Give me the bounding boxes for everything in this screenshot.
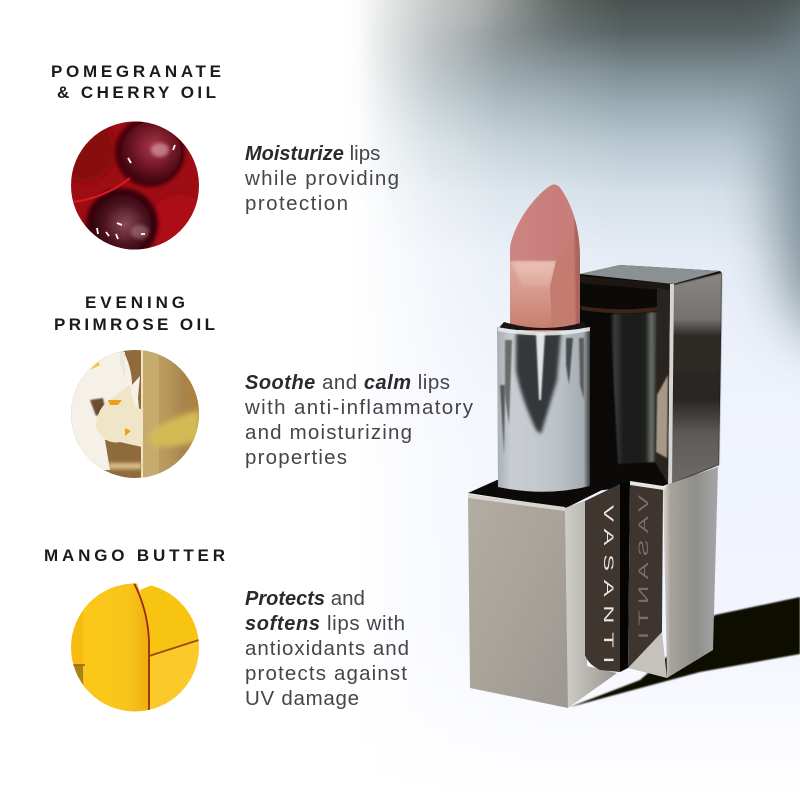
lipstick base [468, 467, 718, 708]
description: protects and softens: softens lips with [245, 612, 405, 635]
cast shadow of lipstick [570, 597, 800, 707]
photo: primrose flower and golden oil [70, 345, 202, 480]
lipstick metal tube [497, 322, 590, 492]
description: soothe and calm: properties [245, 446, 347, 469]
description: moisturize: protection [245, 192, 348, 215]
description: moisturize [244, 142, 399, 215]
description: soothe and calm: with anti-inflammatory [244, 396, 474, 419]
description: soothe and calm: and moisturizing [245, 421, 412, 444]
description: protects and softens: UV damage [245, 687, 359, 710]
photo: sliced mango [71, 584, 199, 712]
mirrored brand reflection: VASANTI [636, 495, 651, 639]
heading: evening primrose oil [54, 293, 215, 334]
heading: evening primrose oil: EVENING [85, 293, 185, 312]
description: moisturize: while providing [244, 167, 399, 190]
heading: pomegranate & cherry oil [51, 62, 221, 102]
heading: mango butter: MANGO BUTTER [44, 546, 225, 565]
engraved brand VASANTI: VASANTI [601, 505, 616, 663]
description: soothe and calm: Soothe and calm lips [245, 371, 450, 394]
lipstick product [468, 180, 722, 708]
heading: evening primrose oil: PRIMROSE OIL [54, 315, 215, 334]
lipstick cap [580, 265, 722, 492]
description: protects and softens: protects against [245, 662, 407, 685]
heading: pomegranate & cherry oil: POMEGRANATE [51, 62, 221, 81]
photo: cherries in red oil [71, 122, 199, 250]
description: moisturize: Moisturize lips [245, 142, 380, 165]
description: protects and softens [245, 587, 409, 710]
lipstick bullet [510, 184, 580, 332]
description: protects and softens: Protects and [245, 587, 365, 610]
heading: pomegranate & cherry oil: & CHERRY OIL [57, 83, 216, 102]
description: soothe and calm [244, 371, 474, 469]
description: protects and softens: antioxidants and [245, 637, 409, 660]
